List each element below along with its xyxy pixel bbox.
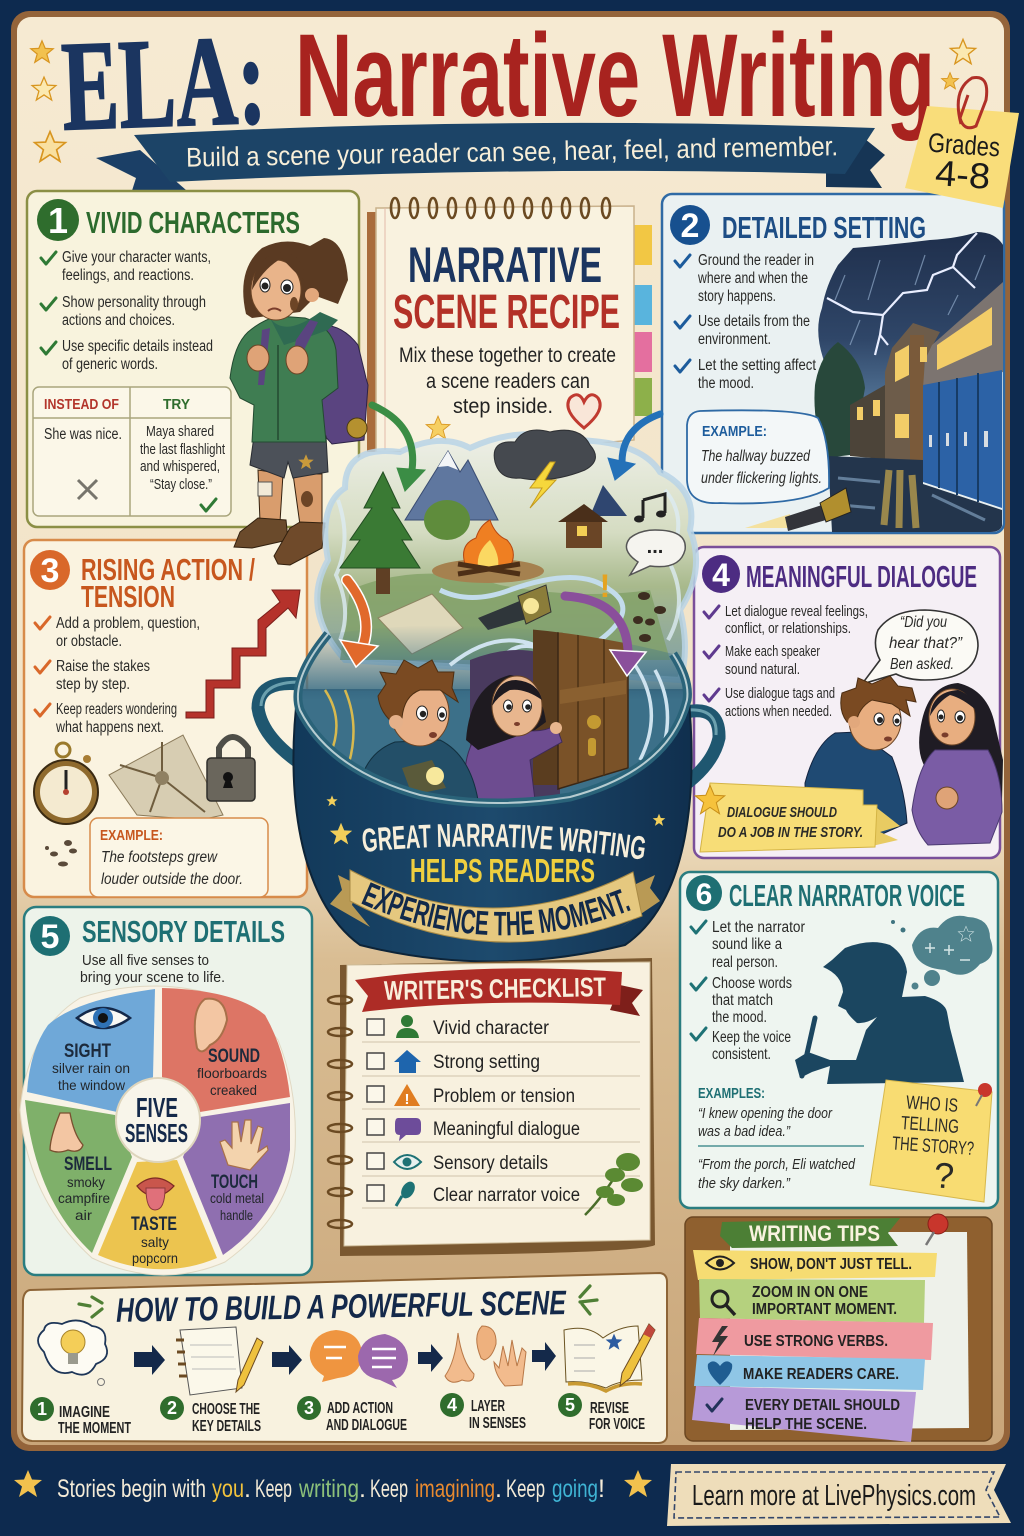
intro text: Use all five senses to bbox=[82, 953, 209, 969]
number badge 3: 3 bbox=[41, 552, 59, 590]
icon: nose, ear, hand bbox=[445, 1326, 526, 1386]
icon: heart bbox=[568, 395, 600, 428]
step 1: IMAGINE bbox=[59, 1404, 110, 1421]
bullet list: Let the setting affect bbox=[698, 357, 817, 374]
icon: pushpin bbox=[976, 1083, 992, 1106]
writer's checklist notebook bbox=[328, 958, 655, 1256]
sticky note: who is telling bbox=[870, 1080, 992, 1202]
illustration: girl with backpack bbox=[230, 238, 368, 565]
footer message: Keep bbox=[506, 1475, 545, 1503]
bullet list: what happens next. bbox=[55, 719, 164, 736]
example box bbox=[90, 818, 268, 897]
ruled lines bbox=[362, 1042, 640, 1208]
footer message: you bbox=[212, 1475, 244, 1503]
bullet list: the mood. bbox=[698, 375, 754, 392]
tip: every detail bbox=[692, 1386, 916, 1442]
mist swirls bbox=[336, 490, 679, 640]
step 4: LAYER bbox=[471, 1398, 505, 1415]
wheel centre bbox=[116, 1078, 200, 1162]
stars decoration bbox=[31, 39, 976, 161]
example quotes: “I knew opening the door bbox=[698, 1106, 833, 1122]
step 5: REVISE bbox=[590, 1400, 629, 1417]
step 4: IN SENSES bbox=[469, 1415, 526, 1432]
cooking pot: HELPS READERS bbox=[410, 852, 595, 889]
taste segment: TASTE bbox=[131, 1214, 177, 1235]
smell segment: smoky bbox=[67, 1174, 105, 1190]
bullet list: Give your character wants, bbox=[62, 249, 211, 266]
step 4: 4 bbox=[447, 1395, 457, 1415]
bullet list: story happens. bbox=[698, 288, 776, 305]
example quotes bbox=[698, 1085, 864, 1192]
panel 1: vivid characters bbox=[27, 191, 359, 527]
storm scene illustration bbox=[814, 232, 1003, 532]
row: sensory details bbox=[367, 1153, 548, 1174]
illustration: story scene rising from pot bbox=[317, 430, 696, 680]
bullet list: Let dialogue reveal feelings, bbox=[725, 604, 868, 620]
smell segment bbox=[25, 1100, 132, 1253]
hands bbox=[247, 345, 269, 371]
bullet list: sound natural. bbox=[725, 662, 800, 678]
number badge 3 bbox=[30, 550, 70, 590]
touch segment: TOUCH bbox=[211, 1172, 258, 1193]
bullet list: or obstacle. bbox=[56, 633, 122, 650]
bullet list: actions and choices. bbox=[62, 312, 175, 329]
pebbles and notes bbox=[633, 592, 666, 642]
instead-of table: TRY bbox=[163, 396, 190, 413]
tip: verbs bbox=[696, 1318, 933, 1360]
icon: notebook and pencil bbox=[176, 1327, 263, 1395]
example bubble bbox=[687, 410, 829, 503]
touch segment: handle bbox=[220, 1207, 253, 1223]
pencil bbox=[802, 1018, 815, 1076]
step 3: AND DIALOGUE bbox=[326, 1417, 407, 1434]
backpack bbox=[300, 325, 368, 444]
shorts bbox=[250, 436, 328, 478]
bullet list: Use specific details instead bbox=[62, 338, 213, 355]
icon: parsley bbox=[585, 1153, 643, 1215]
panel 3: rising action bbox=[24, 540, 307, 897]
icon: speech bubble: ... bbox=[647, 536, 663, 558]
storm cloud bbox=[494, 430, 595, 480]
example bubble: The hallway buzzed bbox=[701, 448, 811, 465]
step 2: 2 bbox=[167, 1398, 177, 1418]
tip: show: SHOW, DON'T JUST TELL. bbox=[750, 1256, 912, 1273]
bullet list: feelings, and reactions. bbox=[62, 267, 194, 284]
tip: every detail: EVERY DETAIL SHOULD bbox=[745, 1397, 900, 1414]
panel: how to build a powerful scene bbox=[22, 1273, 667, 1443]
number badge 1: 1 bbox=[48, 200, 68, 241]
bullet list bbox=[704, 604, 868, 720]
bullet list: Show personality through bbox=[62, 294, 206, 311]
bullet list: conflict, or relationships. bbox=[725, 621, 851, 637]
footer message bbox=[14, 1470, 652, 1503]
example quotes: EXAMPLES: bbox=[698, 1085, 765, 1102]
example bubble: EXAMPLE: bbox=[702, 423, 767, 440]
heading: TENSION bbox=[81, 579, 175, 614]
row: meaningful dialogue: Meaningful dialogue bbox=[433, 1119, 580, 1140]
bullet list: real person. bbox=[712, 954, 778, 971]
arrow 2 bbox=[272, 1345, 302, 1375]
panel 2: detailed setting bbox=[662, 194, 1004, 533]
row: vivid character: Vivid character bbox=[433, 1018, 550, 1039]
step 2: KEY DETAILS bbox=[192, 1418, 261, 1435]
leaf accents bbox=[79, 1286, 597, 1317]
tip: zoom: ZOOM IN ON ONE bbox=[752, 1284, 868, 1301]
footer message: ! bbox=[598, 1475, 605, 1503]
example box: EXAMPLE: bbox=[100, 827, 163, 844]
note: dialogue should do a job: DO A JOB IN THE STORY. bbox=[718, 824, 863, 841]
instead-of table: INSTEAD OF bbox=[44, 396, 119, 413]
cabin bbox=[558, 485, 627, 548]
pot stars bbox=[326, 795, 665, 844]
sticky note: who is telling: WHO IS bbox=[905, 1092, 959, 1117]
instead-of table: Maya shared bbox=[146, 424, 214, 440]
row: problem or tension: Problem or tension bbox=[433, 1086, 575, 1107]
step 3 bbox=[297, 1396, 407, 1434]
checklist banner bbox=[355, 968, 643, 1016]
instead-of table bbox=[33, 387, 231, 516]
thought cloud bbox=[891, 916, 992, 990]
bullet list: of generic words. bbox=[62, 356, 158, 373]
row: strong setting bbox=[367, 1050, 540, 1073]
icon: lightbulb in cloud bbox=[38, 1320, 107, 1386]
hoodie bbox=[230, 316, 338, 442]
smell segment: SMELL bbox=[64, 1154, 112, 1175]
sticky note: grades bbox=[905, 77, 1019, 208]
bullet list: step by step. bbox=[56, 676, 130, 693]
pebbles bbox=[45, 840, 77, 866]
row: vivid character bbox=[367, 1015, 550, 1039]
example quotes: was a bad idea.” bbox=[698, 1124, 791, 1140]
boots bbox=[234, 518, 288, 548]
bullet list: the mood. bbox=[712, 1009, 767, 1026]
bullet list bbox=[675, 252, 817, 392]
instead-of table: and whispered, bbox=[140, 459, 220, 475]
number badge 2: 2 bbox=[681, 207, 699, 245]
instead-of table: She was nice. bbox=[44, 426, 122, 443]
tip: care bbox=[694, 1355, 925, 1390]
number badge 1 bbox=[37, 199, 79, 241]
bullet list: Keep readers wondering bbox=[56, 701, 177, 718]
bullet list: that match bbox=[712, 992, 773, 1009]
icon: open book and pencil bbox=[564, 1324, 655, 1391]
number badge 5 bbox=[30, 916, 70, 956]
wheel centre: FIVE bbox=[136, 1092, 178, 1123]
recipe heading: NARRATIVE bbox=[408, 237, 602, 293]
step 2: CHOOSE THE bbox=[192, 1401, 260, 1418]
right handle bbox=[668, 710, 719, 796]
bullet list: Choose words bbox=[712, 975, 792, 992]
step 5 bbox=[558, 1393, 645, 1433]
mountains bbox=[405, 451, 498, 520]
bullet list: consistent. bbox=[712, 1046, 771, 1063]
notebook: narrative scene recipe: step inside. bbox=[453, 395, 553, 418]
heading: VIVID CHARACTERS bbox=[86, 205, 300, 240]
pot message: GREAT NARRATIVE WRITING bbox=[362, 824, 646, 860]
icon: padlock bbox=[207, 737, 255, 801]
lightning bbox=[530, 462, 556, 508]
speech bubble: “Did you bbox=[900, 614, 947, 631]
bullet list: Use details from the bbox=[698, 313, 810, 330]
number badge 4: 4 bbox=[712, 557, 730, 593]
bullet list: Ground the reader in bbox=[698, 252, 814, 269]
row: problem or tension bbox=[367, 1084, 575, 1108]
recipe text: Mix these together to create bbox=[399, 344, 616, 367]
arrow 4 bbox=[532, 1342, 556, 1371]
wheel centre: SENSES bbox=[125, 1118, 188, 1148]
tip: every detail: HELP THE SCENE. bbox=[745, 1416, 867, 1433]
footer message: Stories begin with bbox=[57, 1475, 206, 1503]
panel 6: clear narrator voice bbox=[680, 872, 998, 1208]
title: ELA: bbox=[59, 8, 268, 157]
pot body bbox=[293, 690, 692, 962]
blue arrow bbox=[608, 414, 660, 480]
icon: flashlight bbox=[745, 488, 851, 531]
example bubble: under flickering lights. bbox=[701, 470, 822, 487]
bullet list: Use dialogue tags and bbox=[725, 686, 835, 702]
parchment banner: EXPERIENCE THE MOMENT. bbox=[361, 882, 631, 936]
legs bbox=[258, 470, 322, 525]
purple arrow bbox=[565, 596, 646, 676]
sight segment bbox=[27, 989, 155, 1112]
notebook: narrative scene recipe: SCENE RECIPE bbox=[393, 286, 620, 339]
example quotes: the sky darken.” bbox=[698, 1176, 791, 1192]
bullet list: Let the narrator bbox=[712, 919, 805, 936]
sound segment: SOUND bbox=[208, 1046, 260, 1067]
green arrow bbox=[372, 405, 425, 491]
touch segment: cold metal bbox=[210, 1190, 264, 1206]
notebook: narrative scene recipe: a scene readers can bbox=[426, 370, 590, 393]
icon: map bbox=[378, 594, 463, 654]
row: strong setting: Strong setting bbox=[433, 1052, 540, 1073]
pot interior scene bbox=[302, 629, 683, 798]
speech bubble: hear that?” bbox=[889, 635, 963, 652]
icon: pushpin bbox=[926, 1214, 948, 1245]
clipboard: writing tips bbox=[685, 1214, 992, 1442]
pot rim bbox=[298, 634, 687, 803]
touch segment bbox=[183, 1103, 290, 1255]
footer message: going bbox=[552, 1475, 598, 1503]
icon: stopwatch bbox=[34, 743, 98, 824]
smell segment: campfire bbox=[58, 1190, 110, 1206]
cooking pot bbox=[252, 629, 726, 962]
checklist banner: WRITER'S CHECKLIST bbox=[384, 972, 607, 1006]
ground bbox=[340, 574, 670, 660]
sound segment: creaked bbox=[210, 1082, 257, 1098]
notebook: narrative scene recipe bbox=[367, 198, 652, 452]
footer message: . bbox=[244, 1475, 251, 1503]
row: sensory details: Sensory details bbox=[433, 1153, 548, 1174]
panel 5: sensory details: bring your scene to life. bbox=[80, 970, 225, 986]
sticky note: grades: Grades bbox=[927, 128, 1001, 163]
backpack straps bbox=[258, 320, 318, 385]
panel 5: sensory details bbox=[20, 907, 312, 1275]
sticky note: who is telling: ? bbox=[933, 1154, 955, 1197]
number badge 6: 6 bbox=[696, 878, 712, 911]
step 4 bbox=[440, 1393, 526, 1432]
tip: verbs: USE STRONG VERBS. bbox=[744, 1333, 888, 1350]
note: dialogue should do a job bbox=[695, 783, 900, 852]
arrow 3 bbox=[418, 1344, 443, 1372]
bullet list bbox=[35, 615, 200, 736]
illustration: girl bbox=[912, 683, 1003, 845]
sight segment: SIGHT bbox=[64, 1041, 111, 1062]
sound segment bbox=[162, 988, 290, 1112]
bullet list: where and when the bbox=[697, 270, 808, 287]
index tabs bbox=[628, 225, 652, 416]
tip: zoom: IMPORTANT MOMENT. bbox=[752, 1301, 897, 1318]
bullet list bbox=[691, 919, 805, 1063]
bullet list: actions when needed. bbox=[725, 704, 832, 720]
speech bubble: Ben asked. bbox=[890, 656, 954, 673]
paperclip bbox=[958, 77, 987, 128]
footer message: . bbox=[359, 1475, 366, 1503]
link tag bbox=[667, 1464, 1011, 1526]
number badge 5: 5 bbox=[41, 918, 59, 956]
heading bbox=[81, 552, 255, 614]
bullet list: environment. bbox=[698, 331, 771, 348]
icon: music note bbox=[634, 494, 666, 522]
step 3: 3 bbox=[304, 1398, 314, 1418]
taste segment bbox=[98, 1160, 217, 1269]
tip: care: MAKE READERS CARE. bbox=[743, 1366, 899, 1383]
sound segment: floorboards bbox=[197, 1065, 267, 1081]
tip: zoom bbox=[699, 1279, 925, 1323]
step 3: ADD ACTION bbox=[327, 1400, 393, 1417]
icon: speech bubble bbox=[626, 530, 685, 575]
bullet list: Keep the voice bbox=[712, 1029, 791, 1046]
taste segment: popcorn bbox=[132, 1250, 178, 1266]
icon: star bbox=[695, 785, 725, 814]
head and hair bbox=[243, 238, 348, 318]
example box: louder outside the door. bbox=[101, 871, 243, 888]
heading: SENSORY DETAILS bbox=[82, 914, 285, 949]
orange arrow bbox=[340, 580, 378, 667]
row: clear narrator voice: Clear narrator voice bbox=[433, 1185, 580, 1206]
icon: speech bubbles bbox=[310, 1330, 408, 1388]
bullet list: sound like a bbox=[712, 936, 782, 953]
number badge 2 bbox=[670, 205, 710, 245]
heading: RISING ACTION / bbox=[81, 552, 255, 587]
step 1: 1 bbox=[37, 1399, 47, 1419]
spiral binding bbox=[328, 996, 352, 1228]
heading: DETAILED SETTING bbox=[722, 210, 926, 245]
number badge 6 bbox=[686, 875, 722, 911]
row: meaningful dialogue bbox=[367, 1118, 580, 1141]
five senses wheel bbox=[20, 986, 295, 1275]
arrows into the pot bbox=[340, 405, 660, 676]
subtitle ribbon bbox=[96, 123, 885, 197]
heading: HOW TO BUILD A POWERFUL SCENE bbox=[116, 1284, 567, 1330]
footer message: writing bbox=[298, 1475, 359, 1503]
row: clear narrator voice bbox=[367, 1179, 580, 1206]
step 1: THE MOMENT bbox=[58, 1420, 131, 1437]
bullet list: Raise the stakes bbox=[56, 658, 150, 675]
boy in pot bbox=[358, 660, 478, 800]
spiral binding bbox=[391, 198, 610, 218]
arrow 1 bbox=[134, 1345, 165, 1375]
left handle bbox=[258, 682, 304, 766]
instead-of table: “Stay close.” bbox=[150, 477, 212, 493]
illustration: boy bbox=[805, 676, 916, 835]
sticky note: grades: 4-8 bbox=[934, 152, 992, 197]
row: problem or tension: ! bbox=[404, 1091, 410, 1108]
speech bubble bbox=[862, 610, 978, 684]
magic swirls bbox=[325, 640, 668, 775]
example box: The footsteps grew bbox=[101, 849, 219, 866]
tips banner bbox=[720, 1218, 900, 1248]
tips banner: WRITING TIPS bbox=[749, 1221, 880, 1246]
icon: star bbox=[426, 416, 450, 439]
step 5: 5 bbox=[565, 1395, 575, 1415]
title bbox=[59, 8, 935, 157]
note: dialogue should do a job: DIALOGUE SHOULD bbox=[727, 804, 837, 821]
door bbox=[533, 630, 629, 790]
tip: show bbox=[693, 1250, 937, 1280]
taste segment: salty bbox=[141, 1234, 169, 1250]
footer message: . bbox=[495, 1475, 502, 1503]
girl in pot bbox=[465, 675, 562, 800]
footer message: Keep bbox=[255, 1475, 292, 1503]
icon: flashlight bbox=[478, 585, 551, 630]
number badge 4 bbox=[702, 555, 740, 593]
footer message: Keep bbox=[370, 1475, 408, 1503]
campfire bbox=[432, 520, 544, 583]
arrow: rising steps bbox=[186, 590, 300, 718]
sticky note: who is telling: TELLING bbox=[900, 1113, 960, 1138]
step 5: FOR VOICE bbox=[589, 1416, 645, 1433]
small tree bbox=[424, 500, 470, 540]
narrator silhouette bbox=[795, 942, 964, 1084]
bullet list bbox=[41, 249, 213, 373]
bullet list: Add a problem, question, bbox=[56, 615, 200, 632]
sticky note: who is telling: THE STORY? bbox=[891, 1133, 975, 1160]
footer message: imagining bbox=[415, 1475, 495, 1503]
step 2 bbox=[160, 1396, 261, 1435]
bullet list: Make each speaker bbox=[725, 644, 820, 660]
step 1 bbox=[30, 1397, 131, 1437]
smell segment: air bbox=[75, 1207, 92, 1223]
subtitle ribbon: Build a scene your reader can see, hear, feel, and remember. bbox=[186, 131, 838, 173]
tree bbox=[340, 472, 420, 594]
icon: exclamation: ! bbox=[600, 568, 610, 604]
sight segment: silver rain on bbox=[52, 1060, 130, 1076]
example quotes: “From the porch, Eli watched bbox=[698, 1157, 856, 1173]
sight segment: the window bbox=[58, 1077, 126, 1093]
panel 4: meaningful dialogue bbox=[694, 547, 1003, 858]
icon: torn map bbox=[109, 735, 223, 820]
river bbox=[440, 578, 623, 640]
instead-of table: the last flashlight bbox=[140, 442, 225, 458]
